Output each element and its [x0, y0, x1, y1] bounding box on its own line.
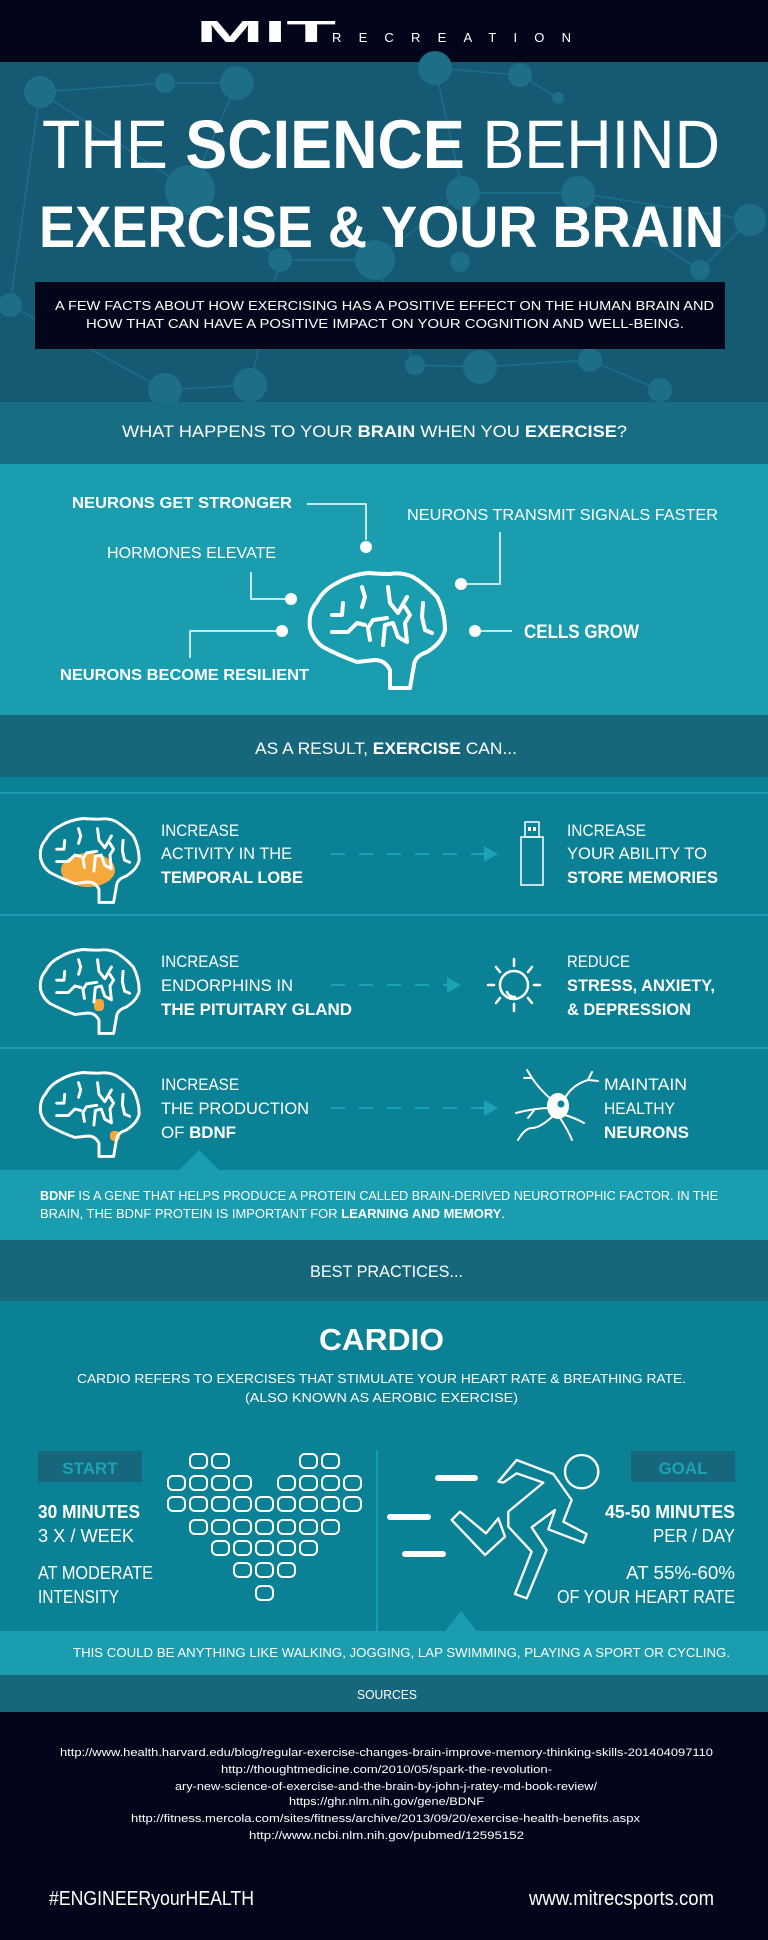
band: best practices — [0, 1240, 768, 1301]
logo — [196, 14, 571, 49]
row 1: INCREASE — [161, 821, 239, 840]
footer: www.mitrecsports.com — [528, 1888, 714, 1910]
row 1: INCREASE — [567, 821, 646, 840]
footer: #ENGINEERyourHEALTH — [49, 1888, 254, 1910]
row 3: THE PRODUCTION — [161, 1099, 309, 1118]
row 3: MAINTAIN — [604, 1075, 687, 1094]
callout: BDNF definition — [0, 1150, 768, 1240]
goal column: 45-50 MINUTES — [605, 1502, 735, 1522]
panel: brain effects: NEURONS GET STRONGER — [72, 495, 292, 512]
title: EXERCISE & YOUR BRAIN — [39, 195, 724, 260]
goal column: OF YOUR HEART RATE — [557, 1587, 735, 1607]
panel: brain effects — [0, 464, 768, 715]
band: as a result — [0, 715, 768, 777]
header background with network pattern — [0, 51, 768, 407]
band: what happens — [0, 402, 768, 464]
goal column: AT 55%-60% — [626, 1563, 735, 1583]
panel: cardio: CARDIO REFERS TO EXERCISES THAT STIMULATE YOUR HEART RATE & BREATHING RATE. — [77, 1371, 686, 1386]
sources list: http://thoughtmedicine.com/2010/05/spark-the-revolution- — [221, 1764, 552, 1776]
row 3: INCREASE — [161, 1075, 239, 1094]
panel: cardio — [0, 1301, 768, 1631]
panel: results — [0, 777, 768, 1170]
goal column: PER / DAY — [653, 1526, 735, 1546]
row 1: YOUR ABILITY TO — [567, 844, 707, 863]
row 3: HEALTHY — [604, 1099, 675, 1118]
panel: brain effects: NEURONS TRANSMIT SIGNALS FASTER — [407, 507, 718, 524]
sources list: http://www.ncbi.nlm.nih.gov/pubmed/12595152 — [249, 1830, 524, 1842]
band: best practices: BEST PRACTICES... — [310, 1262, 463, 1281]
start column: 30 MINUTES — [38, 1502, 140, 1522]
sources list: http://www.health.harvard.edu/blog/regular-exercise-changes-brain-improve-memory-thinking-skills-201404097110 — [60, 1747, 713, 1759]
icon: heart of squares — [168, 1454, 361, 1600]
row 3: NEURONS — [604, 1123, 689, 1142]
row 2 — [40, 949, 715, 1033]
icon: neuron — [516, 1070, 598, 1140]
row 3 — [40, 1070, 689, 1156]
goal column: GOAL — [658, 1459, 708, 1478]
callout: examples — [0, 1611, 768, 1675]
callout: examples: THIS COULD BE ANYTHING LIKE WALKING, JOGGING, LAP SWIMMING, PLAYING A SPORT OR CYCLING. — [73, 1645, 730, 1660]
row 2: STRESS, ANXIETY, — [567, 976, 715, 995]
row 2: THE PITUITARY GLAND — [161, 1000, 352, 1019]
panel: cardio: CARDIO — [319, 1322, 444, 1357]
band: as a result: AS A RESULT, EXERCISE CAN... — [255, 739, 517, 758]
row 2: & DEPRESSION — [567, 1000, 691, 1019]
panel: brain effects: NEURONS BECOME RESILIENT — [60, 667, 309, 684]
start column: START — [62, 1459, 118, 1478]
panel: brain effects: CELLS GROW — [524, 622, 639, 643]
panel: cardio: (ALSO KNOWN AS AEROBIC EXERCISE) — [245, 1390, 518, 1405]
row 1: ACTIVITY IN THE — [161, 844, 292, 863]
icon: large brain — [310, 573, 445, 688]
top bar — [0, 0, 768, 62]
start column: AT MODERATE — [38, 1563, 153, 1583]
band: sources — [0, 1675, 768, 1712]
intro box: HOW THAT CAN HAVE A POSITIVE IMPACT ON YOUR COGNITION AND WELL-BEING. — [86, 316, 684, 331]
row 2: ENDORPHINS IN — [161, 976, 293, 995]
start column: INTENSITY — [38, 1587, 119, 1607]
callout: BDNF definition: BDNF IS A GENE THAT HELPS PRODUCE A PROTEIN CALLED BRAIN-DERIVED NEUROTROPHIC FACTOR. IN THE — [40, 1189, 718, 1203]
row 1 — [40, 818, 718, 902]
row 3: OF BDNF — [161, 1123, 236, 1142]
title — [39, 106, 724, 260]
logo: RECREATION — [332, 30, 571, 45]
intro box: A FEW FACTS ABOUT HOW EXERCISING HAS A POSITIVE EFFECT ON THE HUMAN BRAIN AND — [55, 298, 714, 313]
footer — [0, 1712, 768, 1940]
band: what happens: WHAT HAPPENS TO YOUR BRAIN WHEN YOU EXERCISE ? — [122, 422, 627, 441]
goal column — [557, 1451, 735, 1607]
band: sources: SOURCES — [357, 1687, 417, 1702]
callout: BDNF definition: BRAIN, THE BDNF PROTEIN IS IMPORTANT FOR LEARNING AND MEMORY . — [40, 1207, 505, 1221]
row 2: REDUCE — [567, 952, 630, 971]
row 2: INCREASE — [161, 952, 239, 971]
start column — [38, 1451, 153, 1607]
intro box — [35, 282, 725, 349]
logo: MIT — [196, 14, 336, 49]
row 1: TEMPORAL LOBE — [161, 868, 303, 887]
icon: runner — [390, 1455, 598, 1598]
row 1: STORE MEMORIES — [567, 868, 718, 887]
sources list: http://fitness.mercola.com/sites/fitness/archive/2013/09/20/exercise-health-benefits.aspx — [131, 1813, 641, 1825]
sources list: https://ghr.nlm.nih.gov/gene/BDNF — [289, 1796, 484, 1808]
sources list — [60, 1747, 713, 1842]
panel: brain effects: HORMONES ELEVATE — [107, 545, 276, 562]
sources list: ary-new-science-of-exercise-and-the-brain-by-john-j-ratey-md-book-review/ — [175, 1781, 598, 1793]
title: THE SCIENCE BEHIND — [42, 106, 720, 183]
start column: 3 X / WEEK — [38, 1526, 134, 1546]
